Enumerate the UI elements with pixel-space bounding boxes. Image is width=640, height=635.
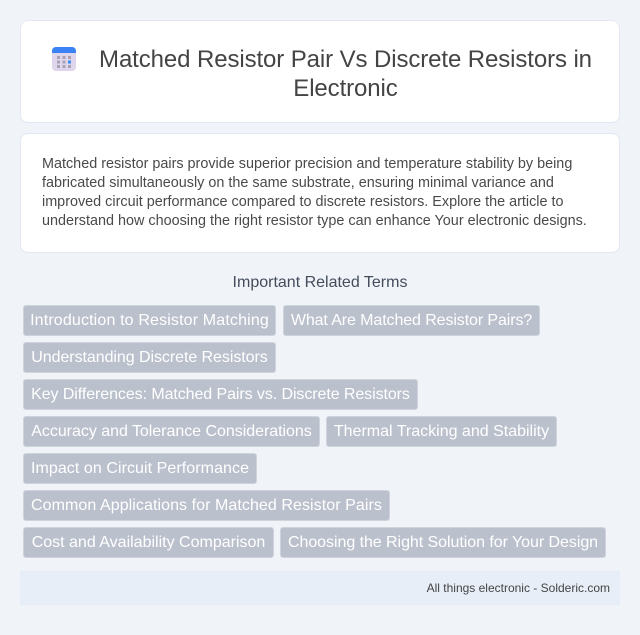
icon: calendar — [52, 47, 76, 71]
pill — [23, 416, 320, 447]
pill: Understanding Discrete Resistors — [31, 349, 268, 366]
heading: important related terms: Important Related Terms — [233, 274, 407, 291]
panel: header card — [20, 20, 620, 123]
pill: Accuracy and Tolerance Considerations — [31, 423, 312, 440]
pill — [23, 342, 276, 373]
pill: Cost and Availability Comparison — [32, 534, 265, 551]
title — [99, 46, 592, 102]
pill: Impact on Circuit Performance — [31, 460, 249, 477]
title: Electronic — [293, 75, 398, 102]
description text: understand how choosing the right resistor type can enhance Your electronic designs. — [42, 213, 587, 229]
panel: description card — [20, 133, 620, 253]
pill — [280, 527, 606, 558]
pill: Thermal Tracking and Stability — [334, 423, 549, 440]
title: Matched Resistor Pair Vs Discrete Resistors in — [99, 46, 592, 73]
pill — [23, 453, 257, 484]
pill: Choosing the Right Solution for Your Design — [288, 534, 598, 551]
description text: improved circuit performance compared to discrete resistors. Explore the article to — [42, 194, 563, 210]
pill — [23, 490, 390, 521]
footer bar — [20, 571, 620, 605]
pill — [23, 305, 276, 336]
panel: related term pills — [23, 305, 606, 558]
pill: Common Applications for Matched Resistor Pairs — [31, 497, 382, 514]
description text: Matched resistor pairs provide superior precision and temperature stability by being — [42, 156, 572, 172]
description text — [42, 156, 587, 229]
pill — [326, 416, 557, 447]
description text: fabricated simultaneously on the same substrate, ensuring minimal variance and — [42, 175, 554, 191]
pill: Introduction to Resistor Matching — [30, 312, 269, 329]
pill — [283, 305, 540, 336]
pill — [23, 379, 418, 410]
pill: Key Differences: Matched Pairs vs. Discrete Resistors — [31, 386, 410, 403]
pill: What Are Matched Resistor Pairs? — [291, 312, 532, 329]
footer credit: All things electronic - Solderic.com — [427, 581, 610, 595]
pill — [23, 527, 274, 558]
